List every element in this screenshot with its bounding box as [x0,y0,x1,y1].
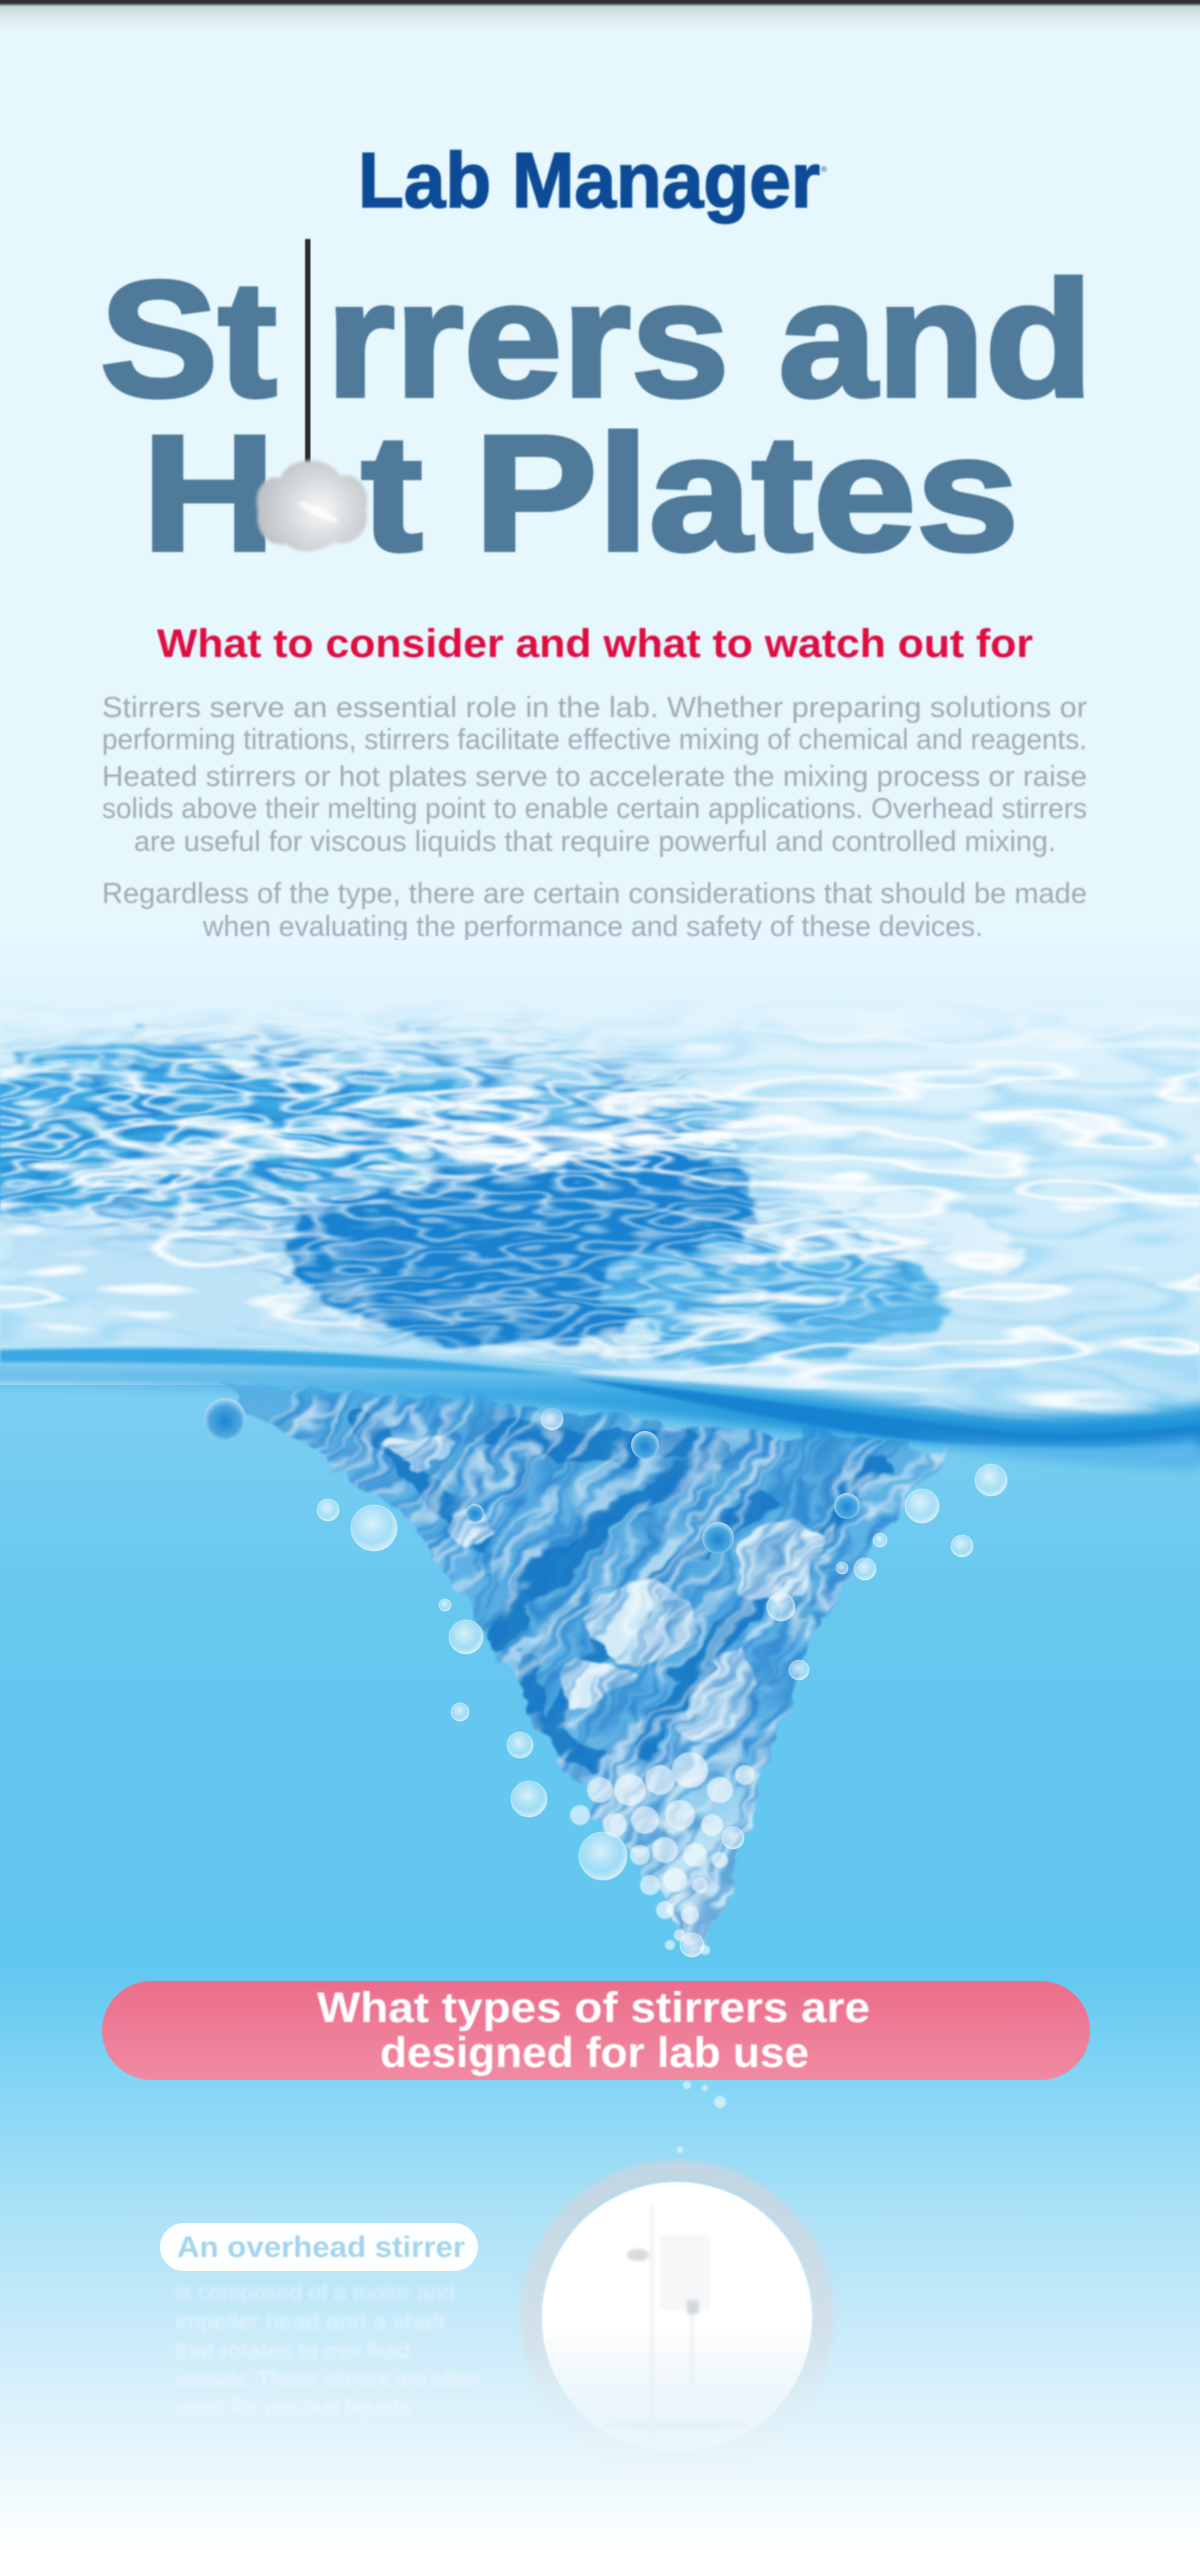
faded description text: that rotates to mix fluid [175,2338,410,2363]
faded description text: vessels. These stirrers are often [175,2367,480,2392]
label pill: An overhead stirrer [160,2223,478,2271]
heading pill: types of stirrers: designed for lab use [380,2029,809,2077]
title: Stirrers and Hot Plates: Stirrers and [100,247,1093,431]
intro text block: performing titrations, stirrers facilitate effective mixing of chemical and reagents. [102,724,1087,756]
intro text block: are useful for viscous liquids that require powerful and controlled mixing. [134,826,1056,858]
logo: Lab Manager: ® [821,165,827,174]
subtitle: What to consider and what to watch out for [157,622,1033,666]
trailing bubbles under pill [677,2081,726,2167]
label pill: An overhead stirrer: An overhead stirrer [177,2231,465,2264]
faded description text: is composed of a motor and [175,2280,455,2305]
intro text block [102,692,1087,943]
wave band at the waterline [0,1340,1200,1462]
logo: Lab Manager: Lab Manager [358,136,820,224]
bubbles around the vortex [204,1398,1007,1957]
illustration: swirling water surface [0,940,1200,1470]
heading pill: types of stirrers [102,1981,1090,2080]
circular stirrer photo [531,2171,823,2463]
intro text block: when evaluating the performance and safety of these devices. [202,911,983,943]
intro text block: Heated stirrers or hot plates serve to accelerate the mixing process or raise [102,761,1087,793]
title: Stirrers and Hot Plates [100,247,1093,585]
panel: overhead stirrer [160,2171,823,2463]
intro text block: solids above their melting point to enable certain applications. Overhead stirrers [102,793,1087,825]
intro text block: Stirrers serve an essential role in the lab. Whether preparing solutions or [102,692,1087,724]
title: Stirrers and Hot Plates: Hot Plates [142,401,1019,585]
lower wave reflection [900,1435,1200,1470]
faded description text [175,2280,480,2419]
icon: stirrer shaft and impeller [257,239,367,551]
heading pill: types of stirrers: What types of stirrers are [317,1984,870,2032]
intro text block: Regardless of the type, there are certain considerations that should be made [102,878,1087,910]
faded description text: used for viscous liquids [175,2394,410,2419]
faded description text: impeller head and a shaft [175,2309,445,2334]
illustration: water vortex below surface [204,1382,1008,1958]
